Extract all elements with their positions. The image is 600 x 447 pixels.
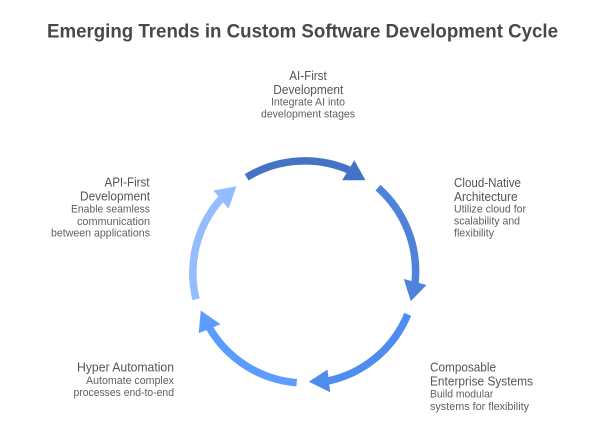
text block: AI-First Development: development stages (261, 109, 355, 121)
text block: Composable Enterprise Systems: Enterprise Systems (430, 375, 533, 389)
text block: Hyper Automation: processes end-to-end (74, 387, 174, 399)
text block: Composable Enterprise Systems: Composable (430, 361, 496, 375)
text block: AI-First Development: AI-First (289, 69, 327, 83)
text block: API-First Development: communication (77, 216, 150, 228)
arrow: Cloud-Native to Composable (378, 188, 426, 301)
text block: AI-First Development: Development (273, 83, 344, 97)
text block: API-First Development: API-First (104, 176, 150, 190)
arrow: Hyper Automation to API-First (199, 310, 297, 383)
cycle diagram (193, 160, 426, 392)
text block: Cloud-Native Architecture (454, 176, 526, 239)
text block: Cloud-Native Architecture: Architecture (454, 190, 518, 204)
text block: Cloud-Native Architecture: Cloud-Native (454, 176, 521, 190)
title: Emerging Trends in Custom Software Development Cycle (47, 21, 558, 43)
text block: AI-First Development (261, 69, 355, 121)
text block: Cloud-Native Architecture: scalability and (454, 216, 520, 228)
text block: Hyper Automation: Automate complex (86, 375, 174, 387)
arrow: AI-First to Cloud-Native (247, 160, 366, 180)
text block: Composable Enterprise Systems: Build modular (430, 389, 494, 401)
text block: Cloud-Native Architecture: Utilize cloud for (454, 204, 526, 216)
text block: Composable Enterprise Systems: systems for flexibility (430, 401, 529, 413)
text block: Composable Enterprise Systems (430, 361, 533, 413)
text block: API-First Development (51, 176, 150, 240)
arrow: Composable to Hyper Automation (309, 314, 408, 392)
text block: Cloud-Native Architecture: flexibility (454, 227, 494, 239)
text block: API-First Development: between applications (51, 228, 150, 240)
text block: AI-First Development: Integrate AI into (271, 97, 345, 109)
text block: API-First Development: Enable seamless (71, 204, 150, 216)
arrow: API-First to AI-First (193, 186, 236, 299)
text block: API-First Development: Development (80, 190, 150, 204)
text block: Hyper Automation: Hyper Automation (77, 361, 174, 375)
text block: Hyper Automation (74, 361, 174, 399)
